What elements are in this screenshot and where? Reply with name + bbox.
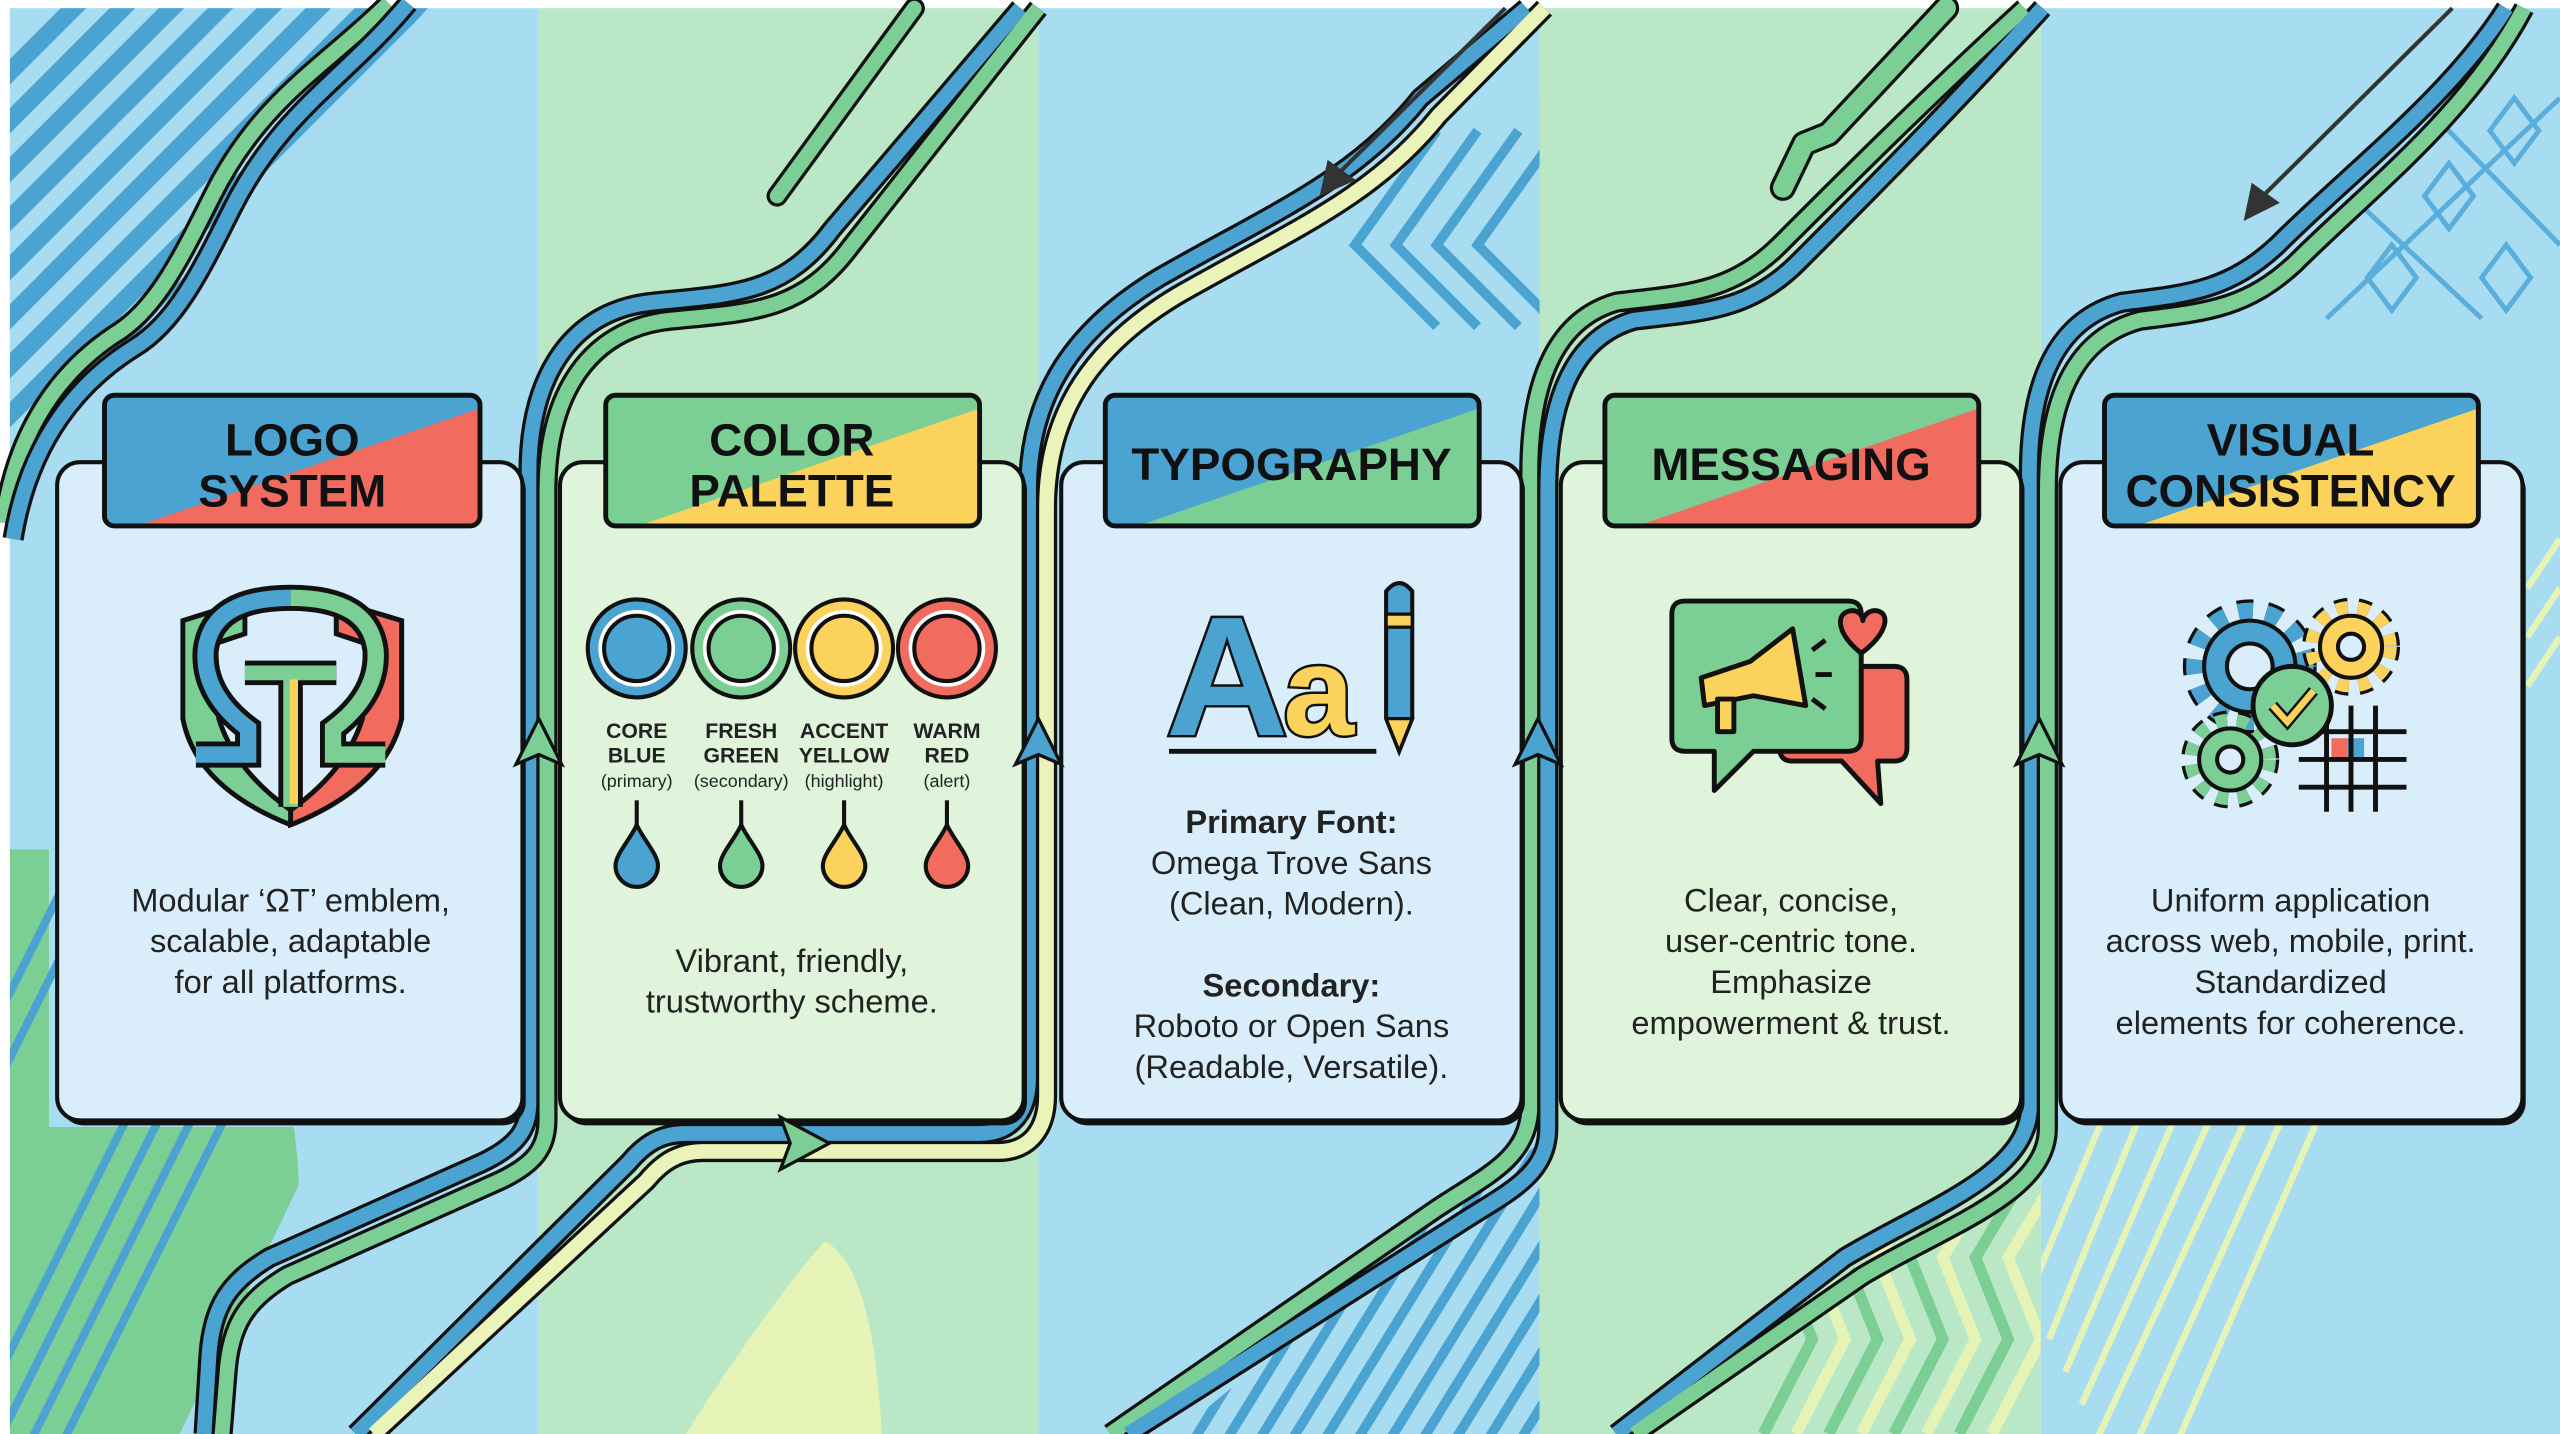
- green stroke top col4: [1783, 8, 1946, 188]
- pipe: between color and typography: [356, 8, 1544, 1434]
- tab: visual consistency: VISUAL: [2207, 415, 2374, 466]
- arrow: up 4: [2016, 719, 2062, 764]
- text: logo description: Modular ‘ΩT’ emblem,: [131, 881, 450, 918]
- text: logo description: scalable, adaptable: [150, 922, 431, 959]
- text: messaging description: [1631, 881, 1951, 1041]
- text: palette description: trustworthy scheme.: [646, 983, 938, 1020]
- swatch labels: ACCENT: [800, 720, 888, 743]
- tab: logo system: [104, 395, 480, 526]
- text: logo description: for all platforms.: [175, 963, 407, 1000]
- drops: [616, 800, 968, 887]
- pointer arrow: col3: [1322, 8, 1505, 193]
- swatch labels: GREEN: [703, 745, 779, 768]
- tab: color palette: COLOR: [709, 415, 874, 466]
- green stroke top col2: [777, 8, 914, 196]
- swatch labels: FRESH: [705, 720, 777, 743]
- swatch labels: (alert): [923, 771, 970, 791]
- text: palette description: [646, 942, 938, 1020]
- swatch labels: YELLOW: [799, 745, 889, 768]
- icon: gears grid: [2191, 608, 2407, 812]
- swatch labels: BLUE: [608, 745, 666, 768]
- text: fonts: Roboto or Open Sans: [1134, 1007, 1449, 1044]
- text: messaging description: user-centric tone.: [1665, 922, 1917, 959]
- swatches: [588, 599, 996, 697]
- text: visual description: across web, mobile, print.: [2106, 922, 2476, 959]
- pipe: between logo and color: [204, 8, 1038, 1434]
- arrow: up 1: [516, 719, 562, 764]
- arrow: right bottom: [780, 1117, 829, 1169]
- swatch labels: WARM: [913, 720, 981, 743]
- tab: color palette: PALETTE: [689, 465, 894, 516]
- text: fonts: (Readable, Versatile).: [1135, 1048, 1448, 1085]
- text: palette description: Vibrant, friendly,: [675, 942, 908, 979]
- panel: visual consistency: [2060, 395, 2526, 1125]
- text: logo description: [131, 881, 450, 1000]
- text: fonts: Secondary:: [1203, 966, 1380, 1003]
- text: visual description: Standardized: [2194, 963, 2387, 1000]
- icon: omega shield: [183, 598, 402, 825]
- text: messaging description: empowerment & trust.: [1631, 1004, 1951, 1041]
- tab: typography: [1105, 395, 1479, 526]
- panel: logo system: [57, 395, 526, 1125]
- swatch labels: (secondary): [694, 771, 789, 791]
- swatch labels: (primary): [601, 771, 673, 791]
- tab: typography: TYPOGRAPHY: [1131, 439, 1451, 490]
- arrow: up 3: [1515, 719, 1561, 764]
- text: visual description: Uniform application: [2151, 881, 2430, 918]
- tab: visual consistency: [2104, 395, 2478, 526]
- text: messaging description: Emphasize: [1710, 963, 1872, 1000]
- icon: megaphone bubbles: [1672, 601, 1907, 804]
- text: visual description: elements for coherence.: [2116, 1004, 2466, 1041]
- text: fonts: (Clean, Modern).: [1169, 885, 1414, 922]
- tab: logo system: LOGO: [225, 415, 360, 466]
- tab: messaging: [1605, 395, 1979, 526]
- tab: color palette: [606, 395, 980, 526]
- tab: logo system: SYSTEM: [198, 465, 386, 516]
- panel: typography: [1061, 395, 1525, 1125]
- text: fonts: [1134, 803, 1449, 1085]
- text: messaging description: Clear, concise,: [1684, 881, 1898, 918]
- pipe: left edge: [3, 3, 408, 539]
- swatch labels: RED: [925, 745, 969, 768]
- icon: Aa pencil: [1166, 581, 1412, 771]
- text: fonts: Primary Font:: [1185, 803, 1398, 840]
- arrow: up 2: [1016, 719, 1061, 764]
- pipe: between typography and messaging: [1110, 8, 2042, 1434]
- swatch labels: [601, 720, 981, 791]
- tab: visual consistency: CONSISTENCY: [2126, 465, 2456, 516]
- text: visual description: [2106, 881, 2476, 1041]
- icon: Aa pencil: A: [1166, 581, 1288, 771]
- panel: messaging: [1561, 395, 2024, 1125]
- swatch labels: CORE: [606, 720, 667, 743]
- panel: color palette: [560, 395, 1027, 1125]
- icon: Aa pencil: a: [1283, 620, 1355, 762]
- text: fonts: Omega Trove Sans: [1151, 844, 1432, 881]
- tab: messaging: MESSAGING: [1651, 439, 1931, 490]
- swatch labels: (highlight): [805, 771, 883, 791]
- pointer arrow: col5: [2247, 8, 2452, 217]
- pipe: between messaging and visual: [1616, 8, 2524, 1434]
